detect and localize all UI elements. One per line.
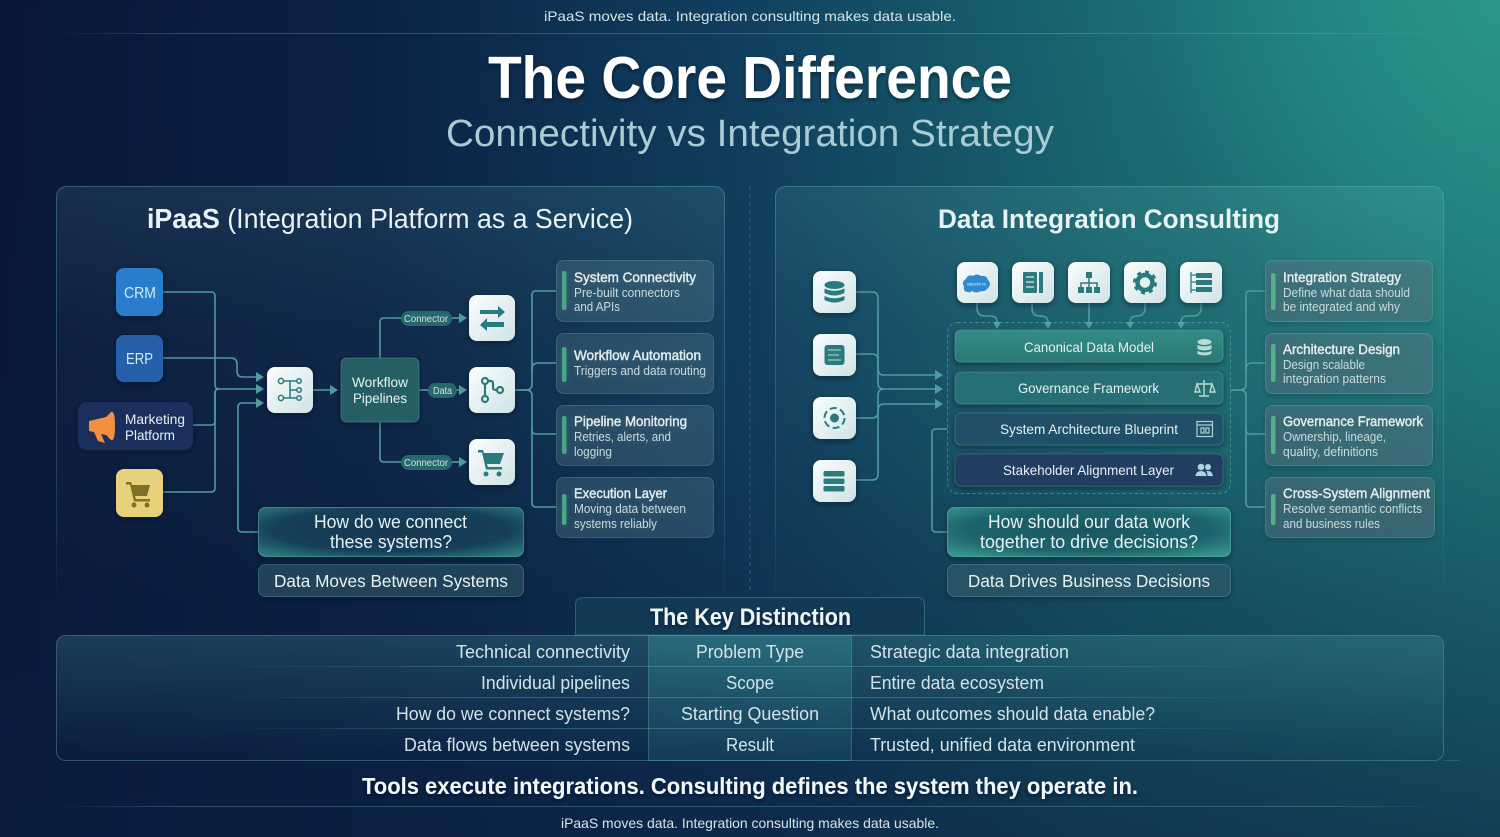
connector lines: consulting: [856, 291, 1265, 532]
pill: data: Data: [433, 386, 452, 397]
title: The Core Difference: [488, 45, 1012, 111]
card: Architecture Design: Architecture Design: [1283, 341, 1400, 357]
bar: System Architecture Blueprint: [955, 413, 1223, 445]
question box: iPaaS: How do we connect: [314, 512, 467, 532]
closing statement: Tools execute integrations. Consulting defines the system they operate in.: [362, 773, 1138, 799]
card: Pipeline Monitoring: Pipeline Monitoring: [574, 413, 687, 429]
tool tile: gear: [1124, 262, 1166, 303]
card: Architecture Design: [1266, 334, 1432, 394]
row: problem type: [456, 642, 1069, 662]
dashed framework container: [948, 322, 1230, 494]
tool tile: salesforce cloud: salesforce: [967, 282, 986, 286]
question box: iPaaS: [258, 508, 524, 556]
card: System Connectivity: Pre-built connectors: [574, 286, 680, 300]
source tile: database: [813, 271, 856, 313]
tool tile: document: [1012, 262, 1054, 303]
bar: Stakeholder Alignment Layer: [955, 454, 1223, 486]
subtitle: Connectivity vs Integration Strategy: [446, 113, 1054, 155]
workflow pipelines box: Workflow: [352, 375, 408, 390]
row: problem type: Technical connectivity: [456, 642, 630, 662]
row: scope: [481, 673, 1044, 693]
icon: transfer arrows: [469, 295, 515, 341]
source tile: data sheet: [813, 334, 856, 376]
source tile: server: [813, 460, 856, 502]
card: Governance Framework: quality, definitions: [1283, 445, 1378, 459]
question box: consulting: together to drive decisions?: [980, 532, 1198, 552]
icon: branch: [469, 367, 515, 413]
card: Architecture Design: integration patterns: [1283, 372, 1386, 386]
source: marketing platform: Marketing: [125, 411, 185, 427]
card: Execution Layer: Moving data between: [574, 502, 686, 516]
table frame: [56, 636, 1444, 760]
pill: connector top: Connector: [404, 314, 449, 325]
question box: consulting: How should our data work: [988, 512, 1191, 532]
workflow pipelines box: Pipelines: [353, 391, 407, 406]
table tab heading: The Key Distinction: [650, 604, 851, 631]
card: Integration Strategy: Define what data should: [1283, 286, 1410, 300]
card: Execution Layer: systems reliably: [574, 517, 658, 531]
question box: consulting: [948, 508, 1230, 556]
panel: Data Integration Consulting: [776, 186, 1444, 606]
top tagline: iPaaS moves data. Integration consulting makes data usable.: [544, 8, 956, 24]
card: Workflow Automation: Triggers and data routing: [574, 364, 706, 378]
panel heading: iPaaS: iPaaS (Integration Platform as a Service): [147, 203, 633, 234]
centre column: [648, 636, 852, 760]
row: scope: Scope: [726, 673, 774, 693]
source: ERP: ERP: [126, 351, 153, 368]
row: result: [404, 735, 1135, 755]
table tab heading: [576, 598, 924, 635]
question box: iPaaS: these systems?: [330, 532, 452, 552]
card: Execution Layer: Execution Layer: [574, 485, 667, 501]
source: ERP: [116, 335, 163, 382]
pill: data: [428, 383, 457, 398]
outcome box: consulting: Data Drives Business Decisions: [968, 571, 1210, 591]
row: starting question: Starting Question: [681, 704, 819, 724]
panel: iPaaS: [56, 186, 724, 606]
connector lines: iPaaS: [163, 291, 556, 532]
tool tile: salesforce cloud: [957, 262, 998, 303]
source: e-commerce cart: [116, 469, 163, 517]
source: marketing platform: [78, 402, 193, 450]
card: Workflow Automation: [556, 334, 714, 394]
outcome box: iPaaS: Data Moves Between Systems: [274, 571, 508, 591]
row: starting question: [396, 704, 1155, 724]
icon: cart: [469, 439, 515, 485]
card: Cross-System Alignment: and business rules: [1283, 517, 1380, 531]
panel heading: consulting: Data Integration Consulting: [938, 204, 1280, 234]
card: Integration Strategy: Integration Strategy: [1283, 269, 1401, 285]
row: scope: Entire data ecosystem: [870, 673, 1044, 693]
bar: System Architecture Blueprint: System Architecture Blueprint: [1000, 421, 1178, 437]
bar: Stakeholder Alignment Layer: Stakeholder Alignment Layer: [1003, 462, 1174, 478]
bar: Governance Framework: Governance Framework: [1018, 380, 1160, 396]
tool tile: structure list: [1180, 262, 1222, 303]
card: Execution Layer: [556, 478, 714, 538]
card: Integration Strategy: [1266, 260, 1432, 322]
source: CRM: [116, 268, 163, 316]
card: Cross-System Alignment: Cross-System Alignment: [1283, 485, 1430, 501]
card: Pipeline Monitoring: [556, 406, 714, 466]
card: Architecture Design: Design scalable: [1283, 358, 1365, 372]
pill: connector top: [401, 311, 452, 326]
workflow pipelines box: [341, 358, 419, 422]
card: Governance Framework: Governance Framework: [1283, 413, 1424, 429]
row: problem type: Problem Type: [696, 642, 804, 662]
card: Governance Framework: [1266, 406, 1432, 466]
hub tile: [267, 367, 313, 413]
card: Pipeline Monitoring: logging: [574, 445, 612, 459]
card: Cross-System Alignment: [1266, 478, 1434, 538]
card: System Connectivity: System Connectivity: [574, 269, 696, 285]
card: Cross-System Alignment: Resolve semantic conflicts: [1283, 502, 1422, 516]
bar: Governance Framework: [955, 372, 1223, 404]
row: starting question: How do we connect systems?: [396, 704, 630, 724]
card: System Connectivity: and APIs: [574, 300, 620, 314]
bar: Canonical Data Model: Canonical Data Model: [1024, 339, 1154, 355]
bar: Canonical Data Model: [955, 330, 1223, 362]
source: CRM: CRM: [124, 285, 156, 302]
card: Integration Strategy: be integrated and why: [1283, 300, 1401, 314]
row: problem type: Strategic data integration: [870, 642, 1069, 662]
row: result: Data flows between systems: [404, 735, 630, 755]
card: Governance Framework: Ownership, lineage,: [1283, 430, 1386, 444]
outcome box: consulting: [948, 564, 1230, 596]
source: marketing platform: Platform: [125, 427, 175, 443]
row: result: Result: [726, 735, 774, 755]
source tile: process ring: [813, 397, 856, 439]
card: Pipeline Monitoring: Retries, alerts, and: [574, 430, 671, 444]
row: scope: Individual pipelines: [481, 673, 630, 693]
tool tile: hierarchy: [1068, 262, 1110, 303]
card: Workflow Automation: Workflow Automation: [574, 347, 701, 363]
pill: connector bottom: Connector: [404, 458, 449, 469]
row: starting question: What outcomes should data enable?: [870, 704, 1155, 724]
pill: connector bottom: [401, 455, 452, 470]
card: System Connectivity: [556, 260, 714, 322]
outcome box: iPaaS: [258, 564, 524, 596]
row: result: Trusted, unified data environment: [870, 735, 1135, 755]
bottom tagline: iPaaS moves data. Integration consulting makes data usable.: [561, 815, 939, 831]
key distinction table: [56, 598, 1460, 761]
